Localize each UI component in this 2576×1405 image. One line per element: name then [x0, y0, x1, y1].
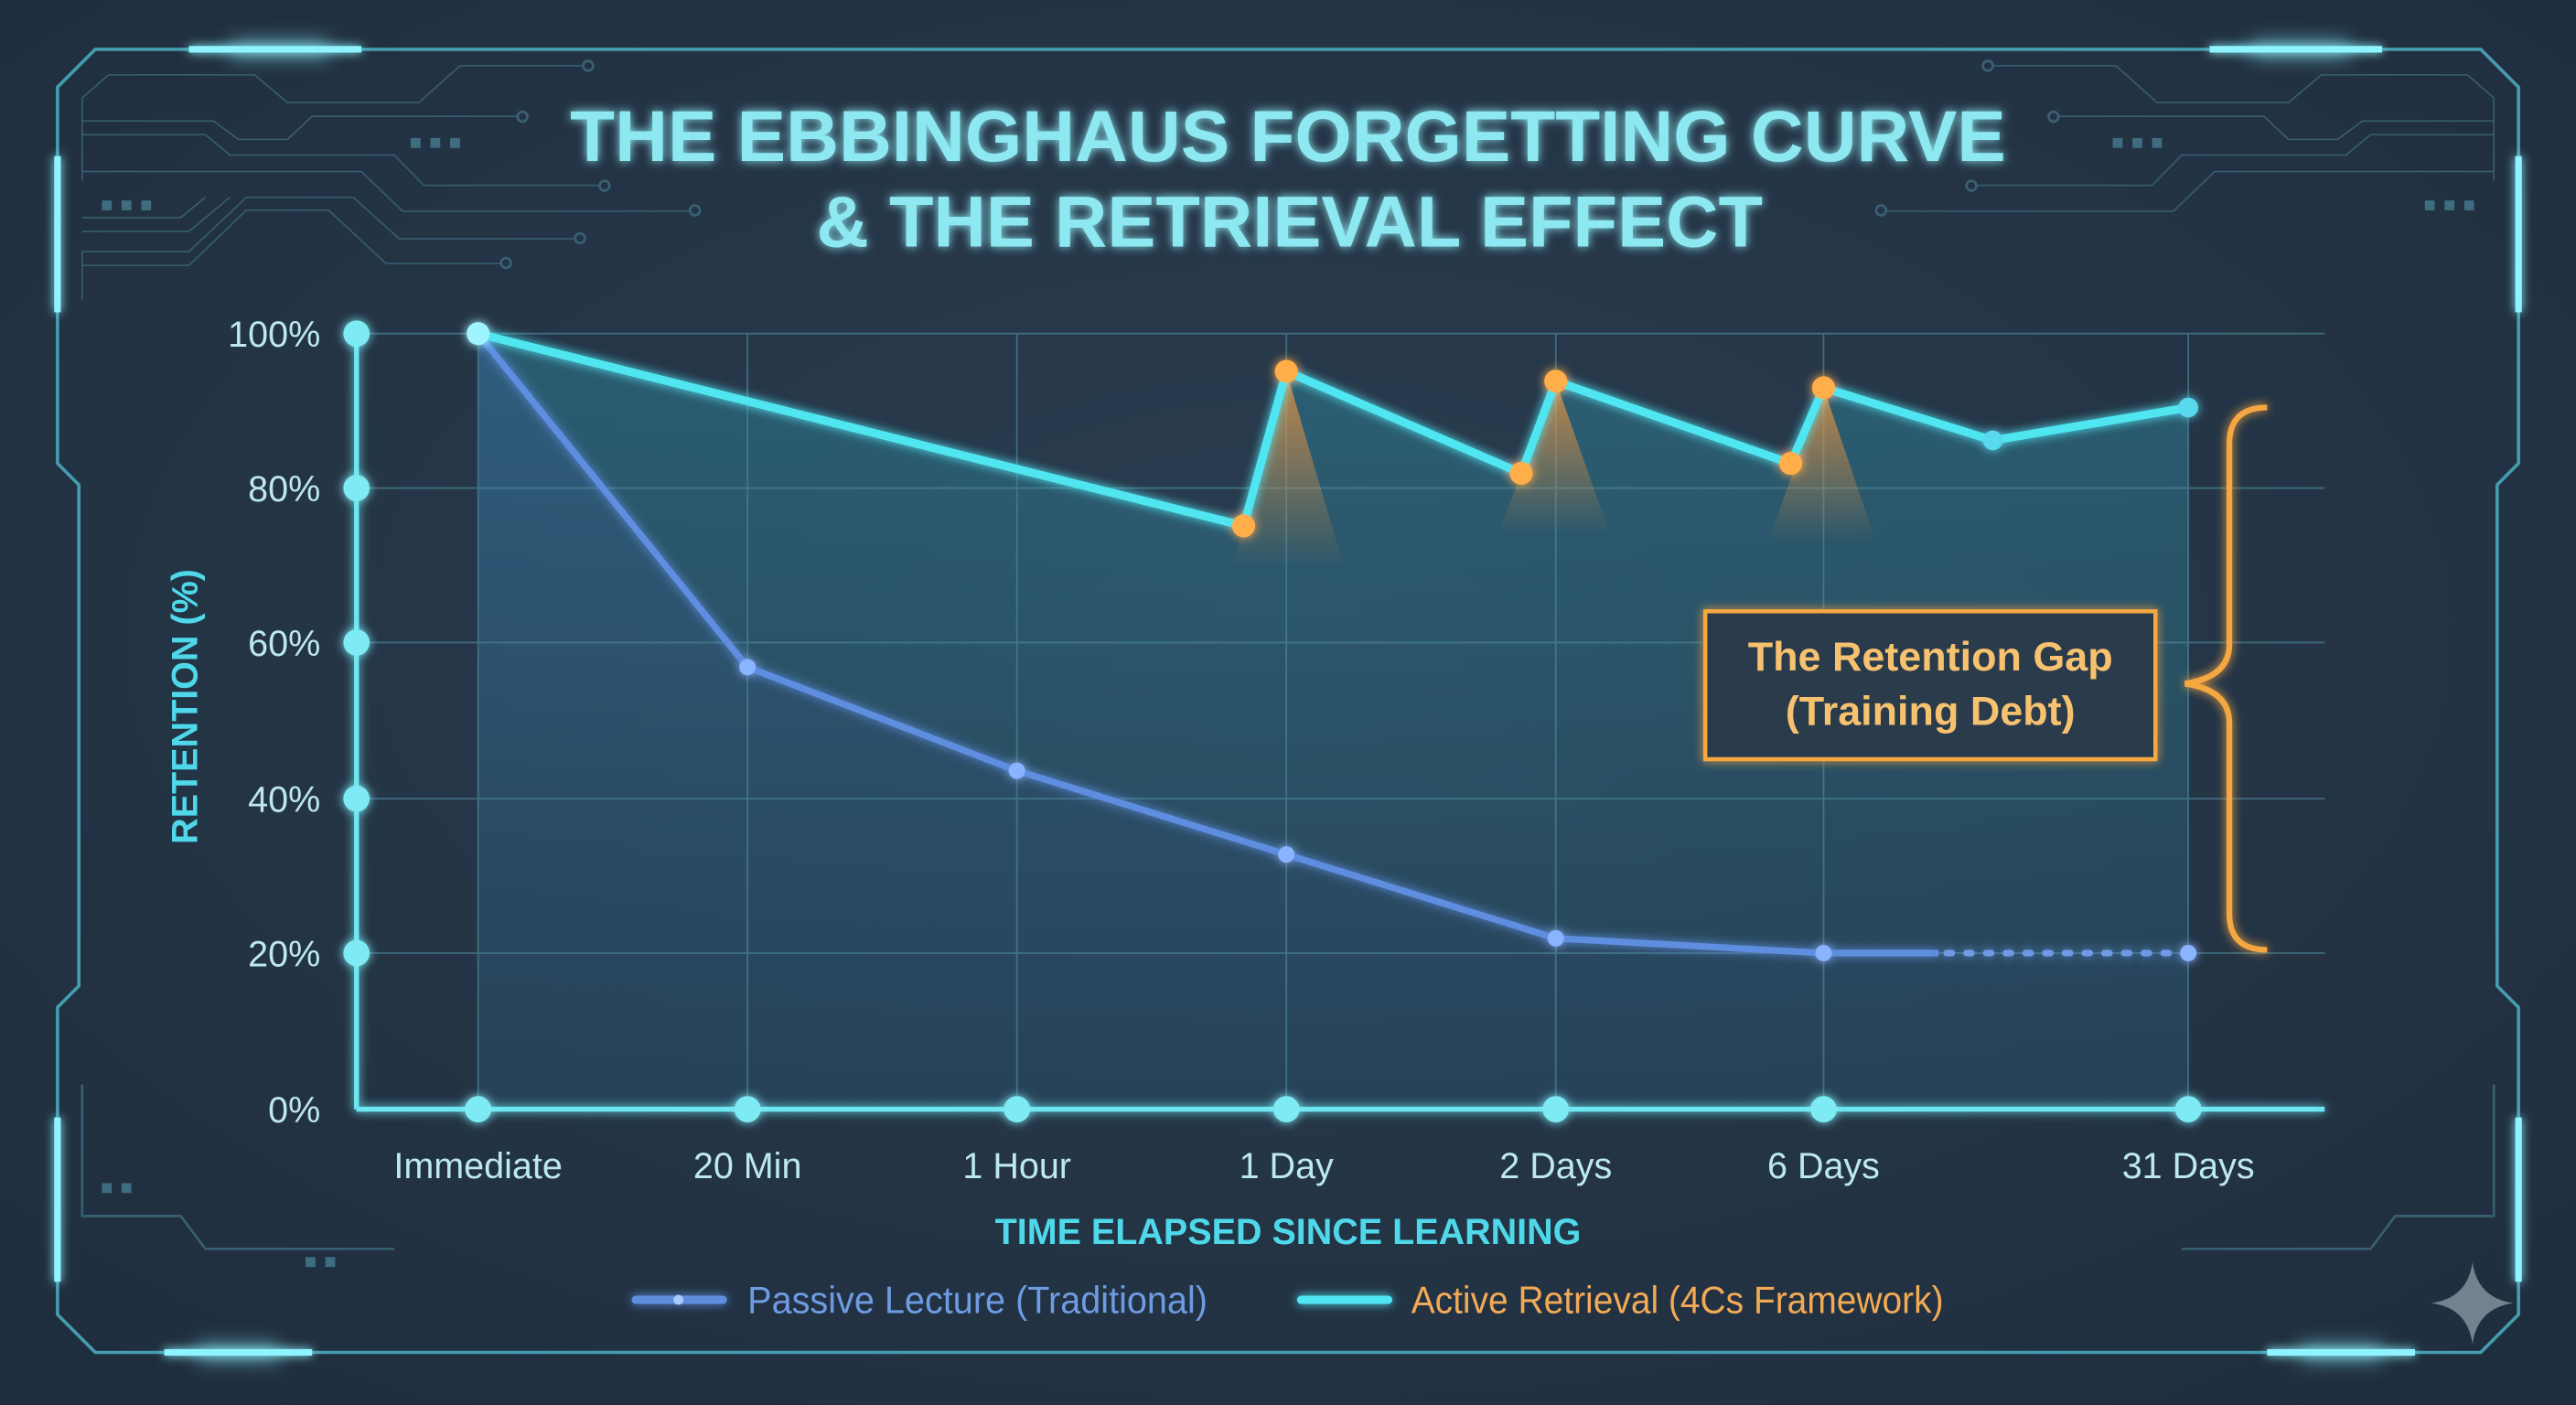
- y axis title: RETENTION (%): [166, 569, 206, 844]
- y axis labels: 80%: [248, 469, 320, 509]
- y axis labels: 0%: [268, 1090, 320, 1131]
- legend: Active Retrieval (4Cs Framework): [1411, 1279, 1944, 1321]
- callout: The Retention Gap: [1748, 633, 2113, 680]
- callout: [1705, 611, 2155, 759]
- x axis labels: 31 Days: [2122, 1146, 2255, 1186]
- x axis labels: 2 Days: [1499, 1146, 1612, 1186]
- axes: [357, 334, 2324, 1110]
- active line: [467, 322, 2198, 537]
- x axis labels: [393, 1146, 2255, 1186]
- y axis labels: 20%: [248, 934, 320, 974]
- passive line: [478, 334, 2196, 961]
- x axis labels: 1 Day: [1240, 1146, 1334, 1186]
- title: THE EBBINGHAUS FORGETTING CURVE: [570, 95, 2006, 177]
- callout: (Training Debt): [1786, 687, 2076, 734]
- title: [570, 95, 2006, 262]
- y axis labels: 60%: [248, 624, 320, 664]
- brace: [2185, 408, 2267, 949]
- chart: [343, 320, 2324, 1122]
- title: & THE RETRIEVAL EFFECT: [817, 180, 1763, 262]
- grid: [357, 334, 2324, 1110]
- legend: [636, 1279, 1944, 1321]
- circuit decorations: [82, 60, 2494, 1249]
- y axis labels: [228, 315, 320, 1131]
- x axis labels: Immediate: [393, 1146, 563, 1186]
- x axis labels: 20 Min: [693, 1146, 801, 1186]
- x axis labels: 1 Hour: [962, 1146, 1071, 1186]
- icon: sparkle: [2431, 1262, 2514, 1345]
- x axis title: TIME ELAPSED SINCE LEARNING: [995, 1212, 1581, 1252]
- y axis labels: 40%: [248, 779, 320, 820]
- spotlights: [1232, 371, 1876, 567]
- area fills: [478, 334, 2188, 1110]
- x axis labels: 6 Days: [1767, 1146, 1880, 1186]
- y axis labels: 100%: [228, 315, 320, 355]
- legend: Passive Lecture (Traditional): [747, 1279, 1208, 1321]
